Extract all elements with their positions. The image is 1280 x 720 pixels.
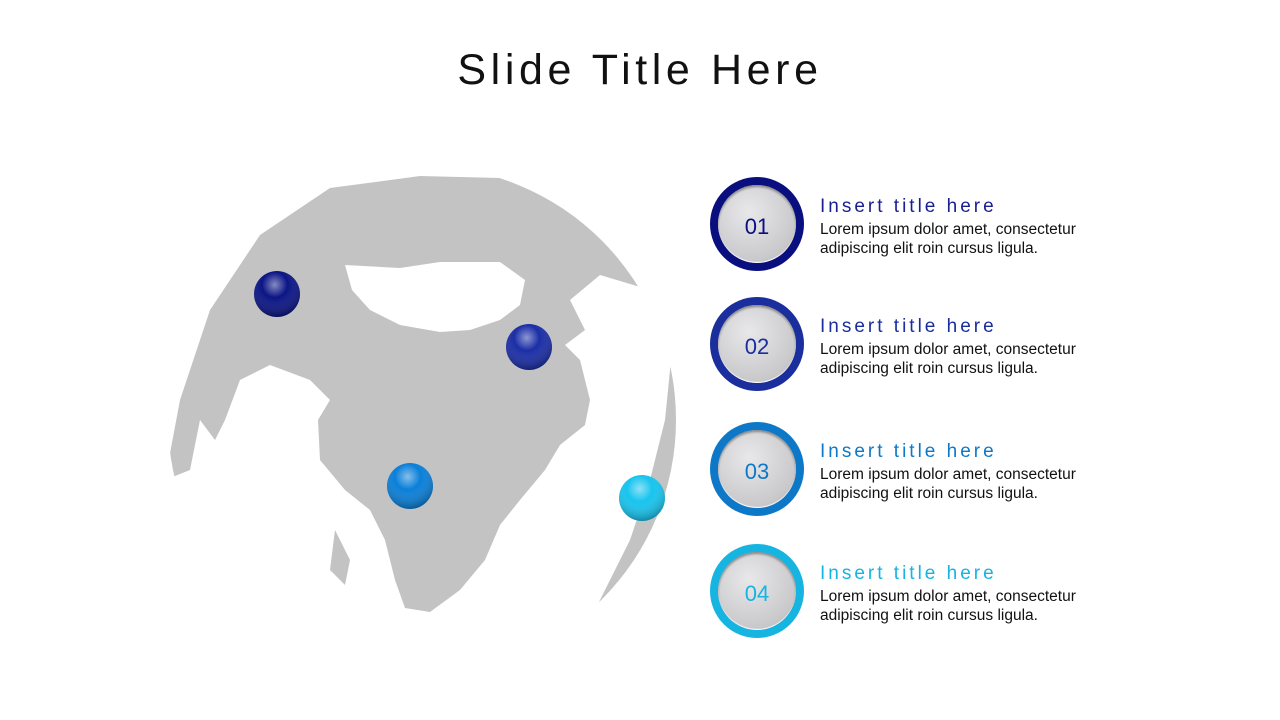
item 03: Lorem ipsum dolor amet, consectetur: [820, 466, 1076, 483]
item 04: adipiscing elit roin cursus ligula.: [820, 607, 1038, 624]
item 01: Lorem ipsum dolor amet, consectetur: [820, 221, 1076, 238]
item 03: [710, 422, 1076, 516]
item 03: Insert title here: [820, 441, 997, 462]
item 04: Insert title here: [820, 563, 997, 584]
item 01: 01: [745, 214, 769, 239]
item 02: adipiscing elit roin cursus ligula.: [820, 360, 1038, 377]
item 04: 04: [745, 581, 769, 606]
pin 3: [387, 463, 433, 509]
title: Slide Title Here: [457, 46, 823, 94]
item 02: Insert title here: [820, 316, 997, 337]
item 03: adipiscing elit roin cursus ligula.: [820, 485, 1038, 502]
pin 1: [254, 271, 300, 317]
item 02: Lorem ipsum dolor amet, consectetur: [820, 341, 1076, 358]
pin 4: [619, 475, 665, 521]
item 04: Lorem ipsum dolor amet, consectetur: [820, 588, 1076, 605]
item 02: 02: [745, 334, 769, 359]
item 01: [710, 177, 1076, 271]
item 03: 03: [745, 459, 769, 484]
item 01: Insert title here: [820, 196, 997, 217]
item 01: adipiscing elit roin cursus ligula.: [820, 240, 1038, 257]
item 04: [710, 544, 1076, 638]
globe map: [170, 176, 676, 612]
item 02: [710, 297, 1076, 391]
pin 2: [506, 324, 552, 370]
